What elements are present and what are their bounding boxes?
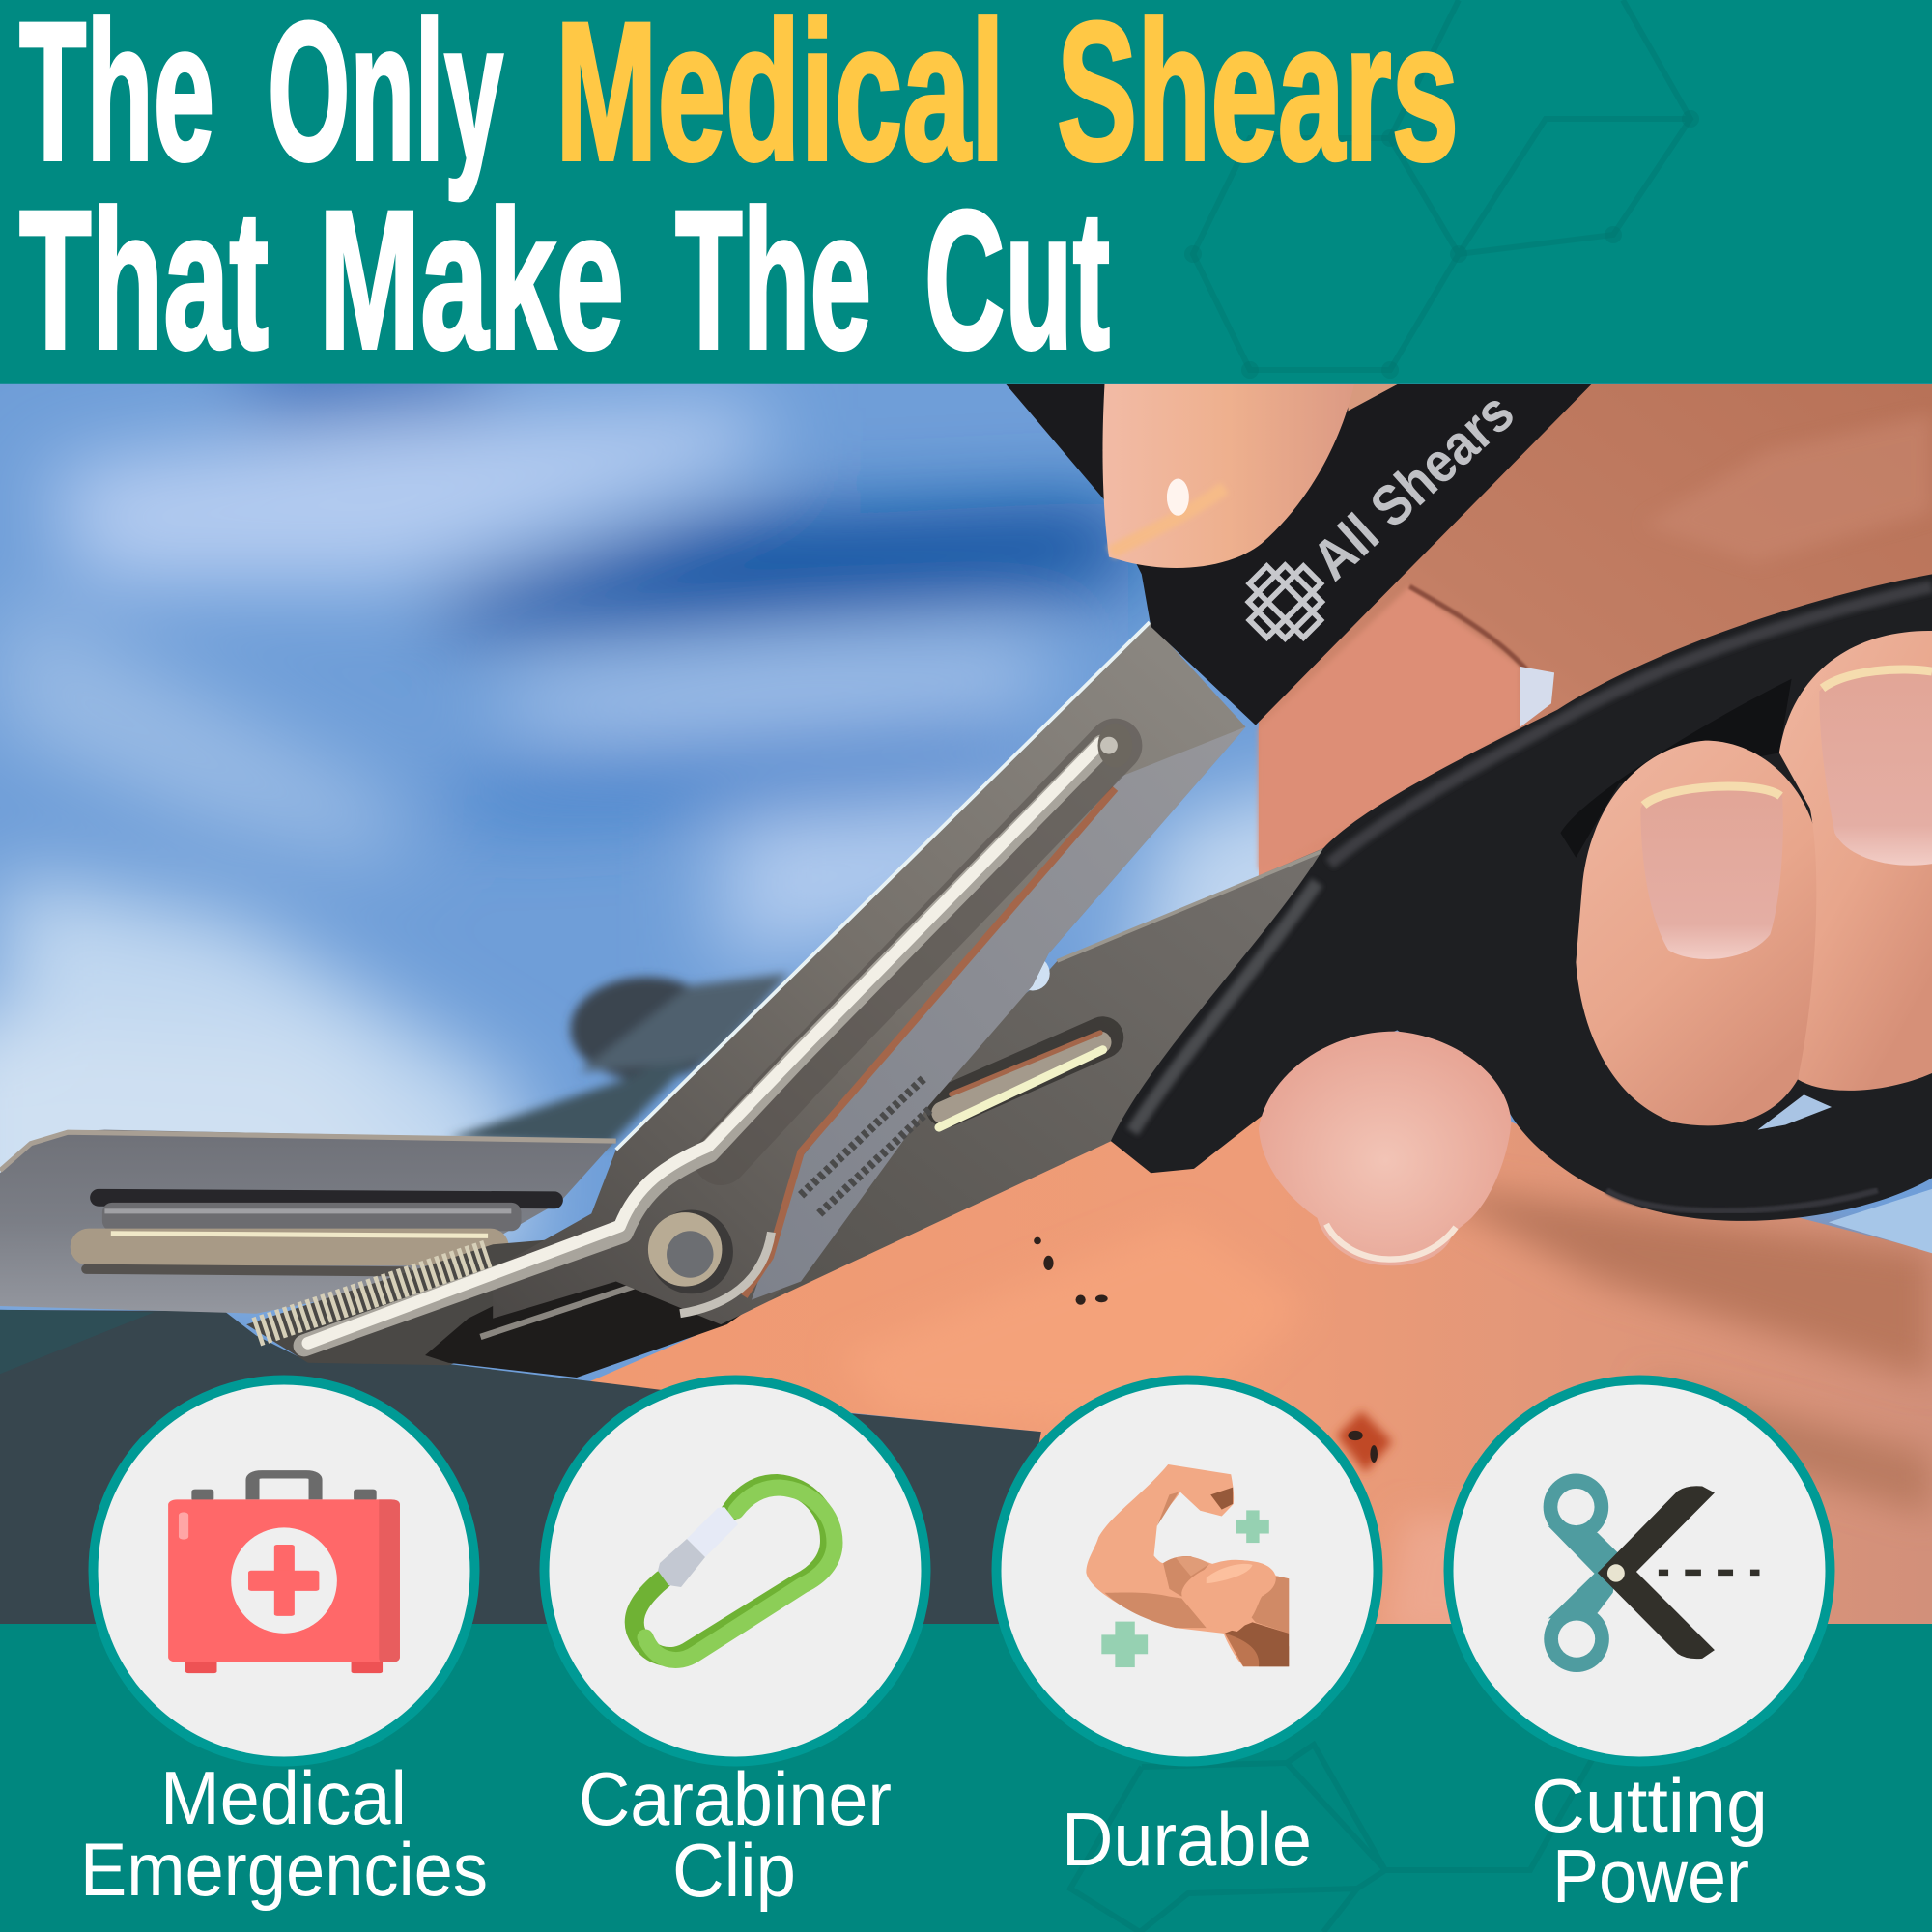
title line 2: The: [675, 170, 871, 390]
brand name: All Shears: [1301, 381, 1526, 592]
title line 2: That: [19, 170, 269, 390]
label: Medical: [160, 1755, 407, 1840]
shears: serrated edge: [256, 1254, 488, 1332]
title: [19, 0, 1459, 390]
label: Power: [1552, 1833, 1749, 1918]
shears: pivot screw: [648, 1210, 733, 1293]
middle finger: [1576, 741, 1820, 1125]
shears: upper black handle: [1006, 384, 1591, 725]
label: Clip: [672, 1828, 796, 1913]
footer band: [0, 1624, 1932, 1932]
label: Durable: [1062, 1797, 1312, 1882]
label: Carabiner: [579, 1756, 892, 1841]
title line 2: [19, 170, 1110, 390]
shears: lower-right blade: [769, 848, 1343, 1301]
blurred background object and dark fabric behind blades: [448, 974, 788, 1146]
badge circle: [1449, 1379, 1830, 1762]
shears: engraving on blade: [801, 1078, 930, 1213]
skin: forearm under fabric: [590, 1116, 1932, 1624]
badge circle: [93, 1379, 475, 1762]
panel: carabiner clip: [545, 1379, 925, 1913]
panel: medical emergencies: [80, 1379, 488, 1912]
ring finger: [1779, 631, 1932, 1091]
title line 2: Make: [319, 170, 624, 390]
shears: dark lower body: [246, 1240, 742, 1378]
brand logo mark: [1244, 561, 1325, 642]
fabric being cut: [0, 1310, 1041, 1638]
photo: hand cutting fabric with medical shears: [0, 337, 1932, 1638]
shears: upper blade with rib: [304, 622, 1246, 1346]
icon: first aid kit: [168, 1474, 400, 1673]
shears: lower black handle: [1111, 574, 1932, 1253]
index finger: [1102, 384, 1354, 568]
thumb: [1259, 1032, 1511, 1265]
icon: flexed arm: [1086, 1464, 1289, 1667]
badge circle: [997, 1379, 1378, 1762]
panel: cutting power: [1449, 1379, 1830, 1918]
label: Emergencies: [80, 1827, 488, 1912]
label: [80, 1755, 488, 1912]
skin: hand behind shears: [1259, 384, 1932, 876]
label: [1531, 1763, 1768, 1918]
shears and hand upper group: [1006, 384, 1932, 1265]
panel: durable: [997, 1379, 1378, 1882]
label: [579, 1756, 892, 1913]
header band: [0, 0, 1932, 384]
title line 2: Cut: [924, 170, 1110, 390]
icon: carabiner: [635, 1484, 835, 1661]
icon: scissors: [1544, 1474, 1759, 1672]
shears: left blade over fabric: [0, 1130, 616, 1314]
photo background: blurred blue scrubs: [0, 383, 1932, 1437]
badge circle: [545, 1379, 925, 1762]
label: Cutting: [1531, 1763, 1768, 1848]
